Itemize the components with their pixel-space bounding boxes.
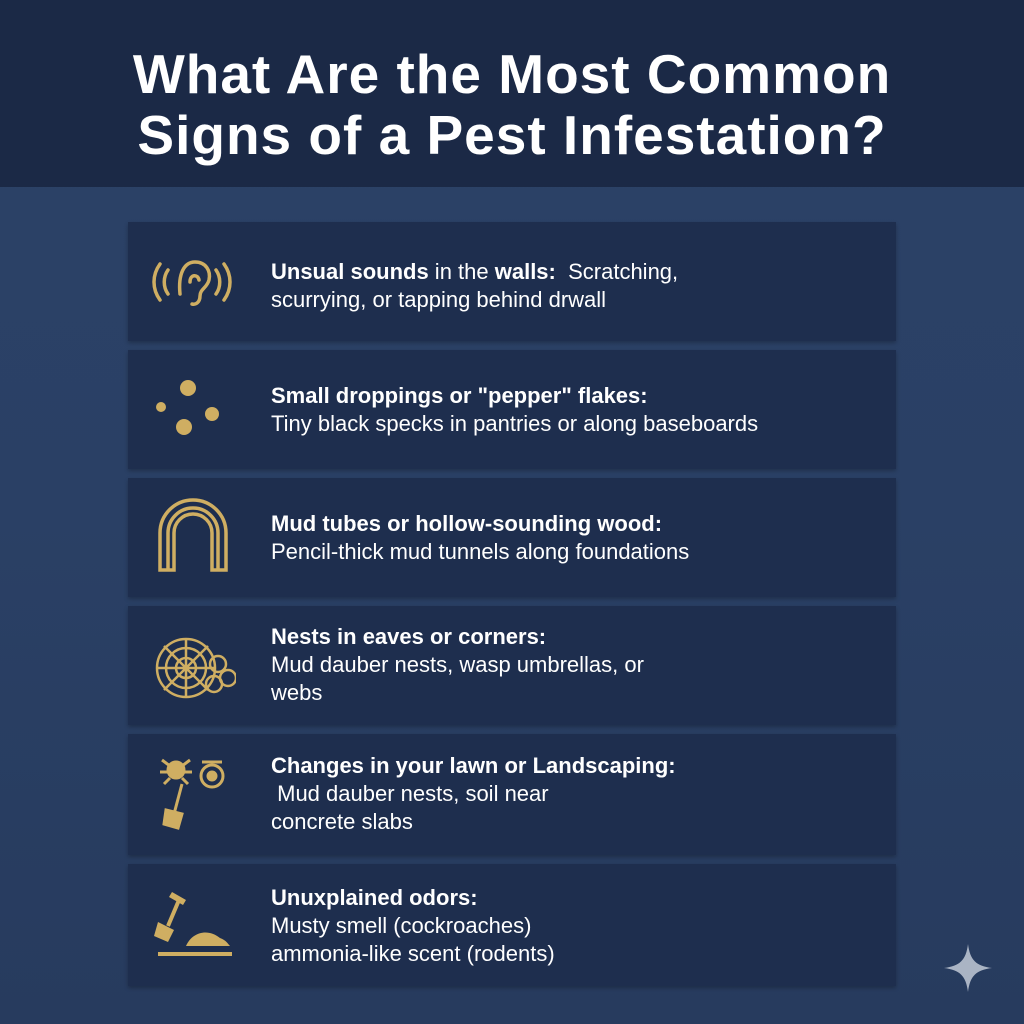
- header band: [0, 0, 1024, 187]
- text: [271, 383, 758, 436]
- panel: lawn: [128, 734, 896, 855]
- panel: unusual sounds: [128, 222, 896, 341]
- text: Small droppings or "pepper" flakes:: [271, 383, 648, 408]
- panel: odors: [128, 864, 896, 986]
- title: [132, 43, 891, 166]
- text: [271, 259, 678, 312]
- text: Tiny black specks in pantries or along baseboards: [271, 411, 758, 436]
- text: Musty smell (cockroaches): [271, 913, 531, 938]
- text: [271, 624, 644, 705]
- title: What Are the Most Common: [133, 43, 891, 105]
- panel: mud tubes: [128, 478, 896, 597]
- text: Unsual sounds in the walls: Scratching,: [271, 259, 678, 284]
- icon: shovel and dirt: [154, 892, 232, 956]
- icon: bug and shovel: [160, 758, 224, 830]
- icon: dots: [156, 380, 219, 435]
- text: scurrying, or tapping behind drwall: [271, 287, 606, 312]
- text: Mud dauber nests, wasp umbrellas, or: [271, 652, 644, 677]
- icon: arch: [158, 498, 228, 572]
- text: Mud dauber nests, soil near: [277, 781, 549, 806]
- icon: web and nest: [156, 638, 236, 698]
- text: Unuxplained odors:: [271, 885, 478, 910]
- text: Pencil-thick mud tunnels along foundations: [271, 539, 689, 564]
- icon: ear: [152, 260, 232, 306]
- text: Changes in your lawn or Landscaping:: [271, 753, 676, 778]
- text: concrete slabs: [271, 809, 413, 834]
- panel: nests: [128, 606, 896, 725]
- text: Nests in eaves or corners:: [271, 624, 546, 649]
- title: Signs of a Pest Infestation?: [137, 104, 887, 166]
- text: [271, 885, 555, 966]
- text: webs: [271, 680, 322, 705]
- text: ammonia-like scent (rodents): [271, 941, 555, 966]
- text: [271, 511, 689, 564]
- panel: droppings: [128, 350, 896, 469]
- text: Mud tubes or hollow-sounding wood:: [271, 511, 662, 536]
- icon: sparkle: [944, 944, 992, 992]
- text: [271, 753, 676, 834]
